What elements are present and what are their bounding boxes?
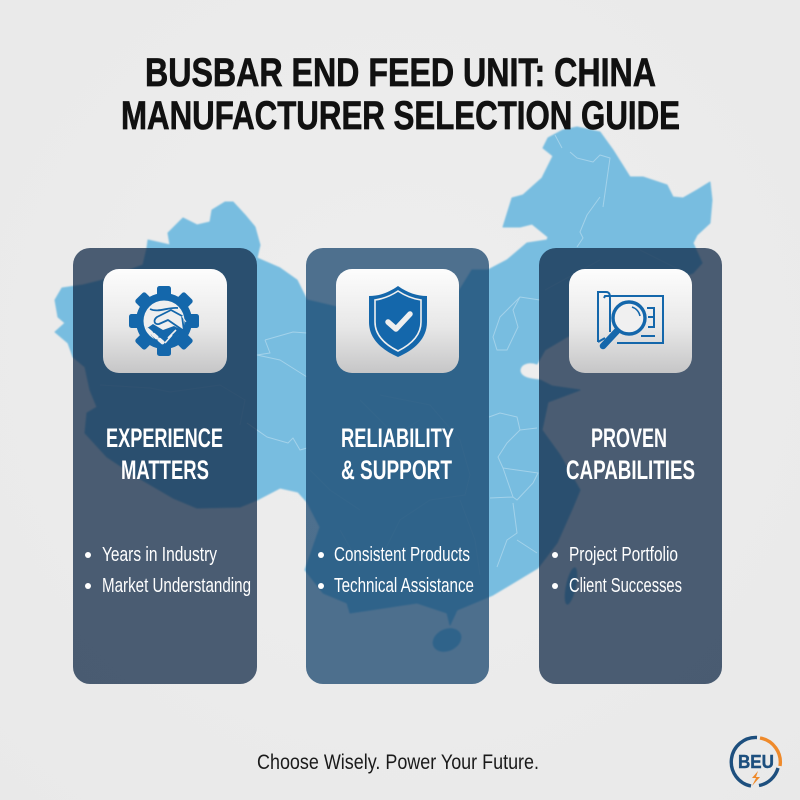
heading: RELIABILITY [341, 423, 454, 453]
panel: proven capabilities [539, 248, 722, 684]
footer tagline: Choose Wisely. Power Your Future. [257, 751, 539, 774]
bullet list: Years in Industry [102, 544, 217, 566]
bullet list [85, 544, 251, 597]
heading: MATTERS [121, 455, 209, 485]
icon tile: shield [336, 269, 459, 373]
heading [106, 423, 223, 485]
bullet list: Project Portfolio [569, 544, 678, 566]
bullet list: Technical Assistance [334, 575, 474, 597]
heading [341, 423, 454, 485]
map of China [55, 127, 712, 656]
bullet list [552, 544, 682, 597]
title: BUSBAR END FEED UNIT: CHINA [145, 51, 656, 95]
icon tile: gear handshake [103, 269, 227, 373]
bullet list: Market Understanding [102, 575, 251, 597]
panel: experience matters [73, 248, 257, 684]
panel: reliability and support [306, 248, 489, 684]
logo: BEU [731, 737, 780, 786]
heading: EXPERIENCE [106, 423, 223, 453]
bullet list: Client Successes [569, 575, 682, 597]
logo: BEU: BEU [738, 752, 774, 772]
heading: CAPABILITIES [566, 455, 695, 485]
bullet list [318, 544, 474, 597]
heading: PROVEN [591, 423, 667, 453]
heading: & SUPPORT [341, 455, 452, 485]
bullet list: Consistent Products [334, 544, 470, 566]
heading [566, 423, 695, 485]
title [121, 51, 680, 138]
icon tile: blueprint and magnifier [569, 269, 692, 373]
